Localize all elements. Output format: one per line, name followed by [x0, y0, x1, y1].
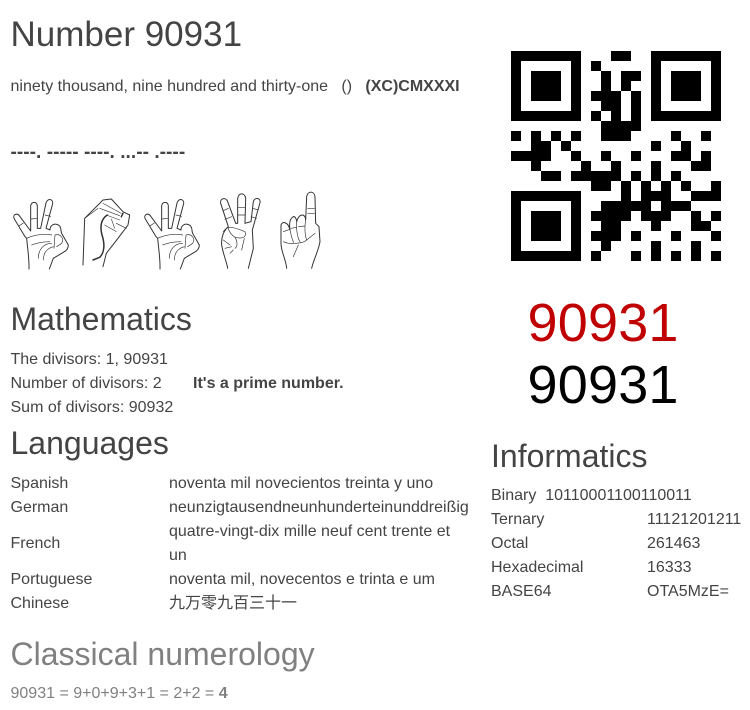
BASE64 value: OTA5MzE=	[647, 583, 729, 600]
Chinese value: 九万零九百三十一	[169, 595, 297, 612]
icon: hand 0	[83, 199, 130, 267]
table: languages	[10, 475, 469, 612]
Hexadecimal label: Hexadecimal	[491, 559, 583, 576]
Portuguese value: noventa mil, novecentos e trinta e um	[169, 571, 435, 588]
title: Number 90931	[10, 15, 242, 54]
German value: neunzigtausendneunhunderteinunddreißig	[169, 499, 469, 516]
QR code	[511, 51, 721, 261]
sum of divisors: Sum of divisors: 90932	[10, 399, 173, 416]
sign language hands	[13, 192, 320, 270]
prime note: It's a prime number.	[193, 375, 344, 392]
French value	[169, 523, 450, 564]
heading: informatics: Informatics	[491, 438, 647, 474]
divisors: The divisors: 1, 90931	[10, 351, 168, 368]
heading: mathematics: Mathematics	[10, 301, 192, 337]
Hexadecimal value: 16333	[647, 559, 692, 576]
number of divisors: Number of divisors: 2	[10, 375, 162, 392]
heading: classical numerology: Classical numerology	[10, 636, 315, 672]
French label: French	[10, 535, 60, 552]
morse code: ----. ----- ----. ...-- .----	[10, 142, 185, 163]
text: mathematics facts	[10, 351, 344, 416]
table: informatics	[491, 487, 741, 600]
icon: hand 9	[14, 200, 68, 269]
icon: hand 9	[145, 200, 199, 269]
big number in red: 90931	[528, 293, 679, 353]
Chinese label: Chinese	[10, 595, 69, 612]
BASE64 label: BASE64	[491, 583, 551, 600]
German label: German	[10, 499, 68, 516]
Octal label: Octal	[491, 535, 528, 552]
Spanish label: Spanish	[10, 475, 68, 492]
Ternary label: Ternary	[491, 511, 544, 528]
Binary row: Binary 10110001100110011	[491, 487, 692, 504]
Ternary value: 11121201211	[647, 511, 741, 528]
icon: hand 1	[281, 192, 320, 268]
number in words and roman numeral: ninety thousand, nine hundred and thirty-one () (XC)CMXXXI	[10, 78, 460, 95]
Octal value: 261463	[647, 535, 700, 552]
French value: un	[169, 547, 187, 564]
French value: quatre-vingt-dix mille neuf cent trente et	[169, 523, 450, 540]
text: numerology sum: 90931 = 9+0+9+3+1 = 2+2 = 4	[10, 685, 228, 702]
Spanish value: noventa mil novecientos treinta y uno	[169, 475, 433, 492]
big number in black: 90931	[528, 355, 679, 415]
heading: languages: Languages	[10, 425, 169, 461]
Portuguese label: Portuguese	[10, 571, 92, 588]
icon: hand 3	[221, 194, 260, 268]
